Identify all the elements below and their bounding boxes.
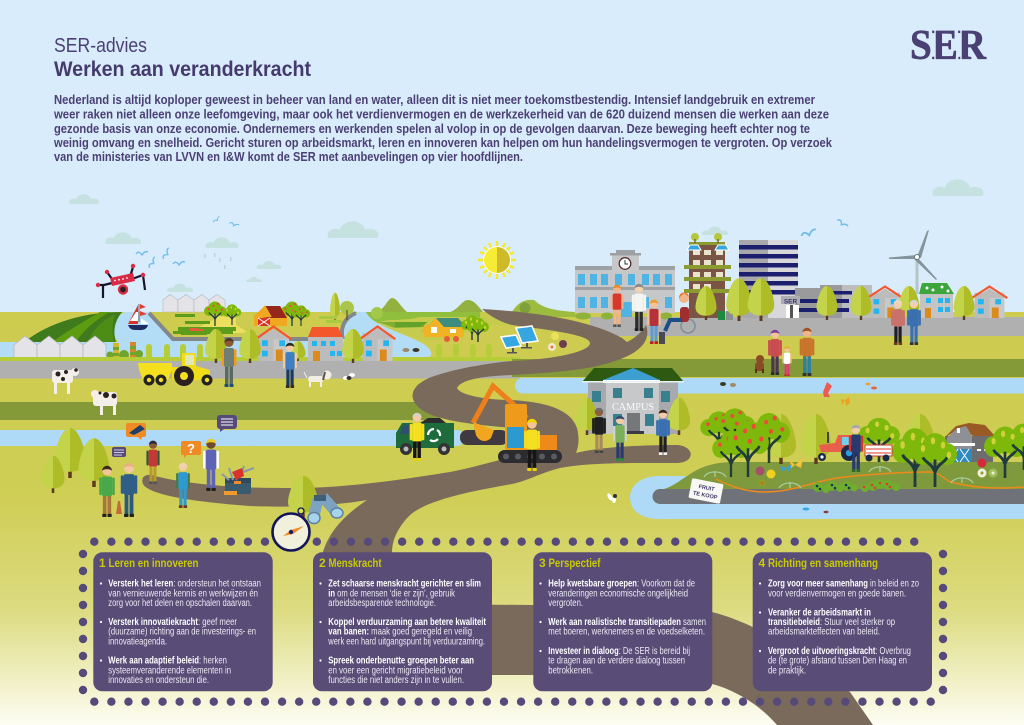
slim trees [319, 293, 354, 323]
low SER building [781, 285, 872, 318]
sign: fruit te koop: TE KOOP [692, 491, 718, 501]
panel 1: leren en innoveren: systeemveranderende elementen in [108, 665, 231, 676]
subtitle: SER-advies [54, 35, 147, 57]
panel 3: perspectief: betrokkenen. [548, 665, 593, 676]
yellow house [421, 318, 466, 337]
panel 1: leren en innoveren: Versterk innovatiekracht: geef meer [108, 617, 238, 628]
pear trees [858, 418, 1024, 487]
panel 3: perspectief [533, 552, 712, 691]
bee near road [343, 373, 355, 380]
panel 3: perspectief: te dragen aan de verdere dialoog tussen [548, 656, 685, 667]
vegetable towers and bushes [106, 342, 143, 360]
panel 3: perspectief: vergroten. [548, 598, 583, 609]
sky [0, 0, 1024, 330]
far greenhouses [163, 294, 225, 312]
birds [136, 216, 848, 268]
panel 1: leren en innoveren: Werk aan adaptief beleid: herken [108, 656, 227, 666]
panel 3: perspectief: met boeren, werknemers en de voedselketen. [548, 627, 705, 638]
panel 1: leren en innoveren: (duurzame) richting aan de investerings- en [108, 627, 256, 638]
recycling bins [718, 311, 733, 320]
panel 4: richting en samenhang: de praktijk. [768, 665, 806, 676]
panel 4: richting en samenhang: Richting en samenhang [768, 556, 878, 570]
panel 1: leren en innoveren: 1 [99, 556, 106, 570]
cow two [91, 390, 117, 415]
campus building: CAMPUS [612, 401, 654, 413]
speech bubble: lines large [217, 415, 237, 432]
panel 2: menskracht: Zet schaarse menskracht gerichter en slim [328, 579, 481, 590]
panel 4: richting en samenhang: de (te grote) afstand tussen Den Haag en [768, 656, 907, 667]
land strip below road edge [0, 357, 520, 361]
panel 4: richting en samenhang: Veranker de arbeidsmarkt in [768, 607, 871, 618]
panel 2: menskracht: 2 [319, 556, 326, 570]
left trees [41, 428, 109, 493]
small fish [802, 508, 828, 513]
panel 1: leren en innoveren: Versterk het leren: ondersteun het ontstaan [108, 579, 261, 590]
yellow tractor with trailer [138, 353, 212, 386]
tree beside binoculars [288, 476, 318, 518]
panel 3: perspectief: veranderingen economische ongelijkheid [548, 588, 688, 599]
panel 1: leren en innoveren: Leren en innoveren [108, 556, 198, 570]
panel 4: richting en samenhang: Vergroot de uitvoeringskracht: Overbrug [768, 646, 911, 657]
panel 1: leren en innoveren [93, 552, 273, 691]
sign: fruit te koop [688, 478, 724, 504]
drone [96, 264, 145, 298]
sign: fruit te koop: FRUIT [698, 484, 716, 493]
panel 2: menskracht: van banen: maak goed geregeld en veilig [328, 627, 472, 638]
barn [944, 423, 995, 462]
intro text: Nederland is altijd koploper geweest in beheer van land en water, alleen dit is niet meer toekomstbestendig. Intensief landgebruik en extremer [54, 92, 815, 107]
panel 2: menskracht: Koppel verduurzaming aan betere kwaliteit [328, 617, 487, 628]
green striped hill [24, 312, 122, 342]
white dog [304, 370, 332, 387]
low SER building: SER [784, 298, 797, 306]
campus trees [576, 398, 690, 435]
intro text: weer raken niet alleen onze leefomgeving, maar ook het verdienvermogen en de werkzekerheid van de 620 duizend mensen die werken aan deze [53, 107, 829, 122]
red tractor with trailer [818, 432, 892, 462]
speech bubble: lines small [112, 447, 126, 457]
panel 4: richting en samenhang: Zorg voor meer samenhang in beleid en zo [768, 579, 919, 590]
fence posts [146, 344, 492, 360]
crop patches [813, 479, 900, 493]
green apartment tower [684, 233, 731, 318]
panel 4: richting en samenhang: arbeidsmarkteffecten van beleid. [768, 627, 880, 638]
panel 4: richting en samenhang: 4 [758, 556, 766, 570]
landscape ground [0, 312, 1024, 725]
trees along right road [696, 278, 974, 321]
speech bubble: book [126, 423, 146, 440]
right island with hills [366, 298, 575, 340]
elderly couple [891, 300, 921, 345]
panel 1: leren en innoveren: van vernieuwende kennis en werkwijzen én [108, 588, 258, 599]
panel 4: richting en samenhang: transitiebeleid: Stuur veel sterker op [768, 617, 895, 628]
panel 3: perspectief: Werk aan realistische transitiepaden samen [548, 617, 706, 628]
bushes and young trees near yellow house [444, 316, 489, 342]
houses on the right [867, 283, 1007, 318]
flowers and butterflies [606, 382, 998, 503]
houses left trio [256, 326, 395, 361]
speech bubble: question [181, 441, 201, 458]
dotted border [83, 542, 943, 702]
SER logo: SER [910, 23, 987, 69]
compass [272, 508, 310, 550]
excavator [460, 386, 562, 463]
helmet worker [524, 419, 540, 471]
speech bubble: question: ? [187, 441, 195, 456]
sailing boat [128, 304, 149, 330]
panel 2: menskracht: Spreek onderbenutte groepen beter aan [328, 656, 474, 666]
sprinklers [704, 466, 973, 488]
orchard water [630, 476, 1024, 519]
irrigation line [716, 472, 1024, 492]
intro text: gezonde basis van onze economie. Ondernemers en werkenden spelen al volop in op de gevolgen daarvan. Deze beweging heeft echter nog te [54, 121, 810, 136]
panel 2: menskracht: arbeidsbesparende technologie. [328, 598, 436, 609]
panel 3: perspectief: Investeer in dialoog: De SER is bereid bij [548, 646, 690, 657]
panel 4: richting en samenhang: voor verdienvermogen en goede banen. [768, 588, 906, 599]
rain drops [204, 253, 232, 269]
panel 3: perspectief: Perspectief [548, 556, 601, 570]
dark green bands [0, 359, 1024, 420]
apple trees [700, 408, 790, 477]
campus people [592, 408, 670, 461]
panel 2: menskracht: Menskracht [328, 556, 382, 570]
panel 1: leren en innoveren: innovatieagenda. [108, 636, 167, 647]
panel 3: perspectief: 3 [539, 556, 546, 570]
winding path [142, 309, 873, 725]
person in wheelchair [665, 292, 695, 333]
right river [515, 378, 1024, 394]
vegetable fields [173, 314, 249, 335]
left grey road [0, 361, 520, 378]
trees along left road [205, 329, 364, 363]
red barn [254, 306, 287, 326]
solar panels [501, 326, 538, 354]
panel 4: richting en samenhang [753, 552, 932, 691]
ducks [402, 348, 420, 352]
intro text: van de ministeries van LVVN en I&W komt de SER met aanbevelingen op vier hoofdlijnen. [54, 149, 523, 164]
panel 3: perspectief: Help kwetsbare groepen: Voorkom dat de [548, 579, 695, 590]
small road along the water [149, 313, 356, 339]
panel 2: menskracht: in om de mensen ‘die er zijn’, gebruik [328, 588, 456, 599]
walking man with blue shirt [283, 343, 297, 388]
lower left river [0, 430, 465, 446]
ducks on right river [720, 382, 877, 390]
title: Werken aan veranderkracht [54, 57, 311, 81]
water: left river and bays [0, 312, 431, 358]
toolbox [222, 466, 254, 495]
clock building [575, 250, 675, 320]
orchard field [664, 462, 1024, 497]
campus building [582, 368, 684, 434]
farmer with tablet [222, 338, 236, 387]
family with dog [755, 328, 814, 376]
recycling worker [410, 413, 424, 461]
group of people on the left [99, 439, 219, 517]
wind turbine [889, 230, 937, 294]
orchard field tip over grey path [664, 465, 760, 489]
panel 1: leren en innoveren: innovaties en ondersteun die. [108, 675, 209, 686]
striped office block [739, 240, 798, 318]
panel 2: menskracht: en voer een gericht migratiebeleid voor [328, 665, 464, 676]
flowers on the blob [548, 332, 567, 351]
recycling truck [396, 418, 454, 455]
orchard trees on the island [204, 302, 310, 326]
people at clock building [611, 284, 665, 344]
sun [478, 241, 516, 279]
left greenhouses [14, 336, 106, 361]
panel 1: leren en innoveren: zorg voor het delen en opschalen daarvan. [108, 598, 252, 609]
panel 2: menskracht: werk een hard uitgangspunt bij verduurzaming. [328, 636, 485, 647]
intro text [53, 92, 833, 164]
cow one [52, 368, 79, 394]
intro text: weinig omvang en snelheid. Gericht sturen op arbeidsmarkt, leren en innoveren kan helpen om hun handelingsvermogen te vergroten. Op verzoek [53, 135, 833, 150]
binoculars [308, 495, 343, 524]
clouds [69, 179, 984, 292]
right grey road [590, 317, 1024, 336]
field background trees [766, 414, 935, 464]
panel 2: menskracht: functies die niet anders zijn in te vullen. [328, 675, 464, 686]
orchard farmer [849, 425, 863, 472]
panel 2: menskracht [313, 552, 492, 691]
orchard grey path [653, 489, 1024, 504]
